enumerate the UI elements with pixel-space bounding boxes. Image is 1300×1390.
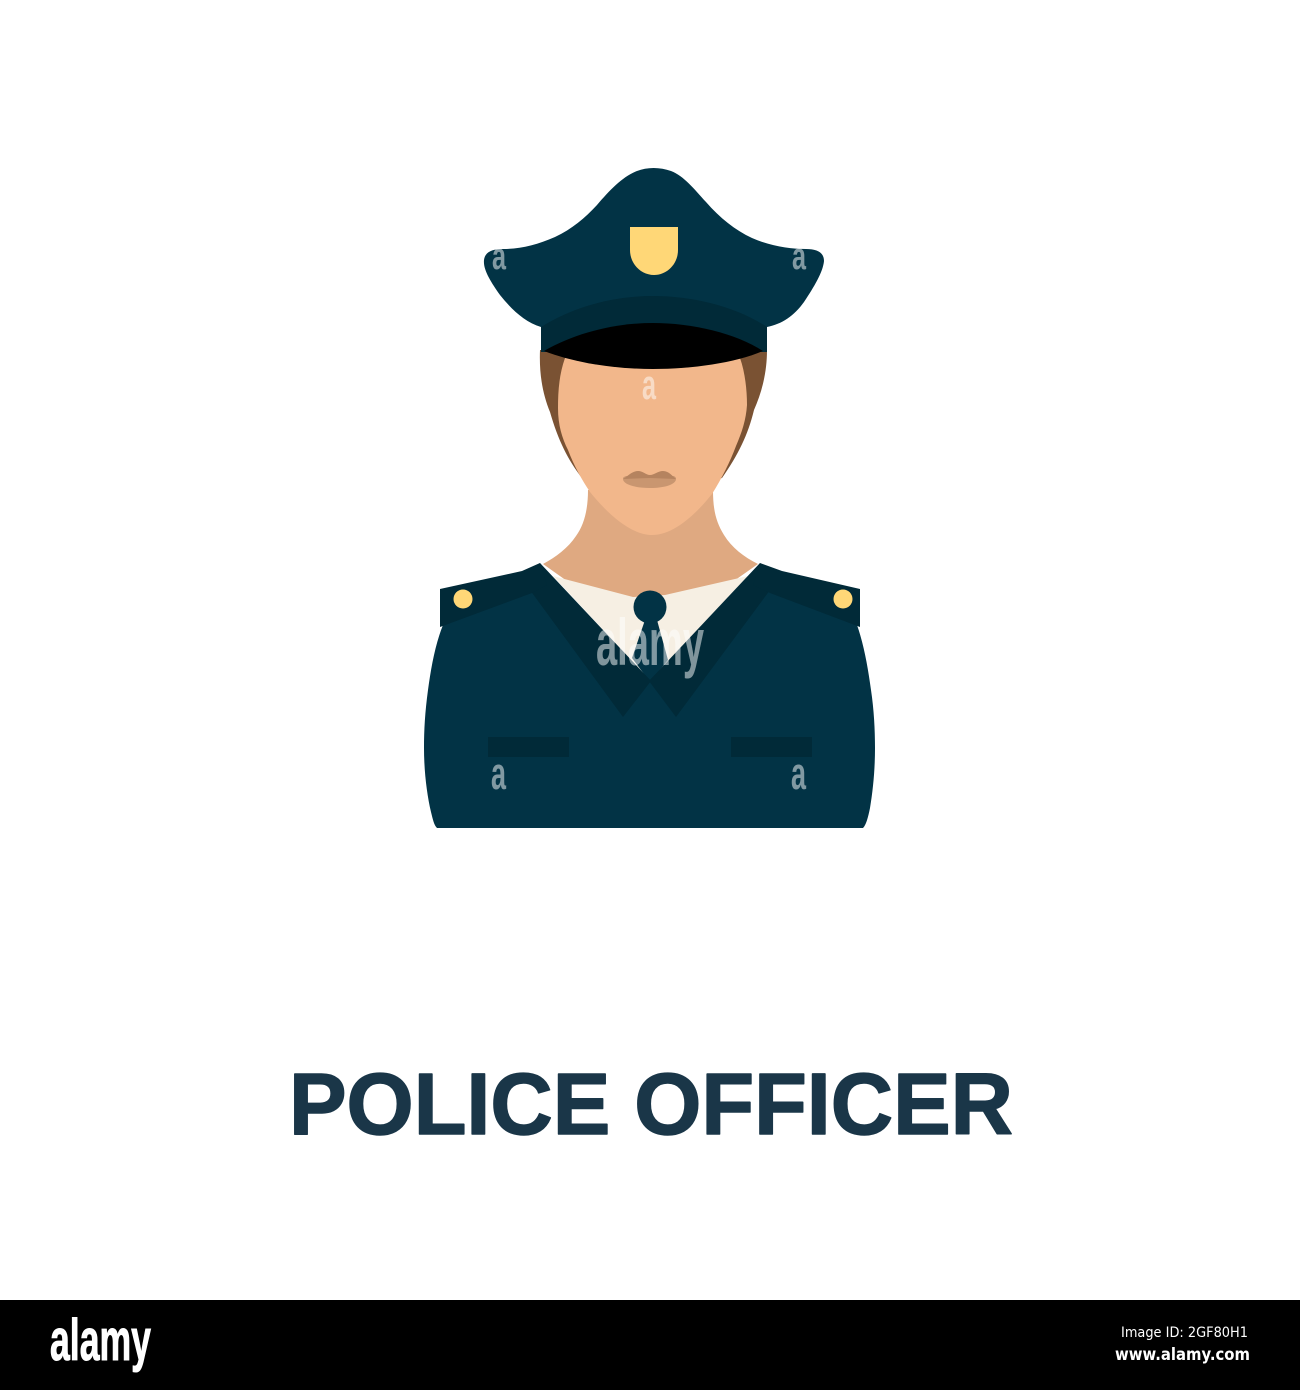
tie	[632, 620, 668, 682]
watermark: a, right pocket: a	[791, 748, 807, 799]
left epaulette	[440, 563, 547, 627]
cap badge	[630, 227, 678, 275]
jacket	[424, 590, 875, 828]
watermark: alamy, chest: alamy	[596, 605, 704, 679]
cap crown	[484, 168, 824, 352]
watermarks	[491, 236, 807, 799]
hair	[540, 350, 767, 500]
left lapel	[530, 563, 651, 717]
watermark: a, cap left: a	[492, 236, 507, 278]
right epaulette button	[834, 590, 852, 608]
watermark: a, forehead: a	[642, 361, 656, 408]
right pocket	[731, 737, 812, 757]
website: www.alamy.com	[1115, 1345, 1250, 1365]
footer logo: alamy	[50, 1308, 151, 1373]
face	[558, 358, 747, 535]
right epaulette	[753, 563, 860, 627]
left epaulette button	[454, 590, 472, 608]
cap visor	[544, 323, 763, 369]
title: POLICE OFFICER	[289, 1056, 1013, 1153]
left pocket	[488, 737, 569, 757]
icon: police officer	[424, 168, 875, 828]
cap band	[541, 296, 767, 352]
mouth	[623, 471, 676, 488]
watermark: a, cap right: a	[792, 236, 807, 278]
right lapel	[649, 563, 770, 717]
footer bar	[0, 1300, 1300, 1390]
watermark: a, left pocket: a	[491, 748, 507, 799]
shirt collar	[553, 576, 748, 680]
tie knot	[634, 590, 666, 624]
image id: Image ID: 2GF80H1	[1121, 1325, 1248, 1341]
neck	[543, 490, 758, 640]
